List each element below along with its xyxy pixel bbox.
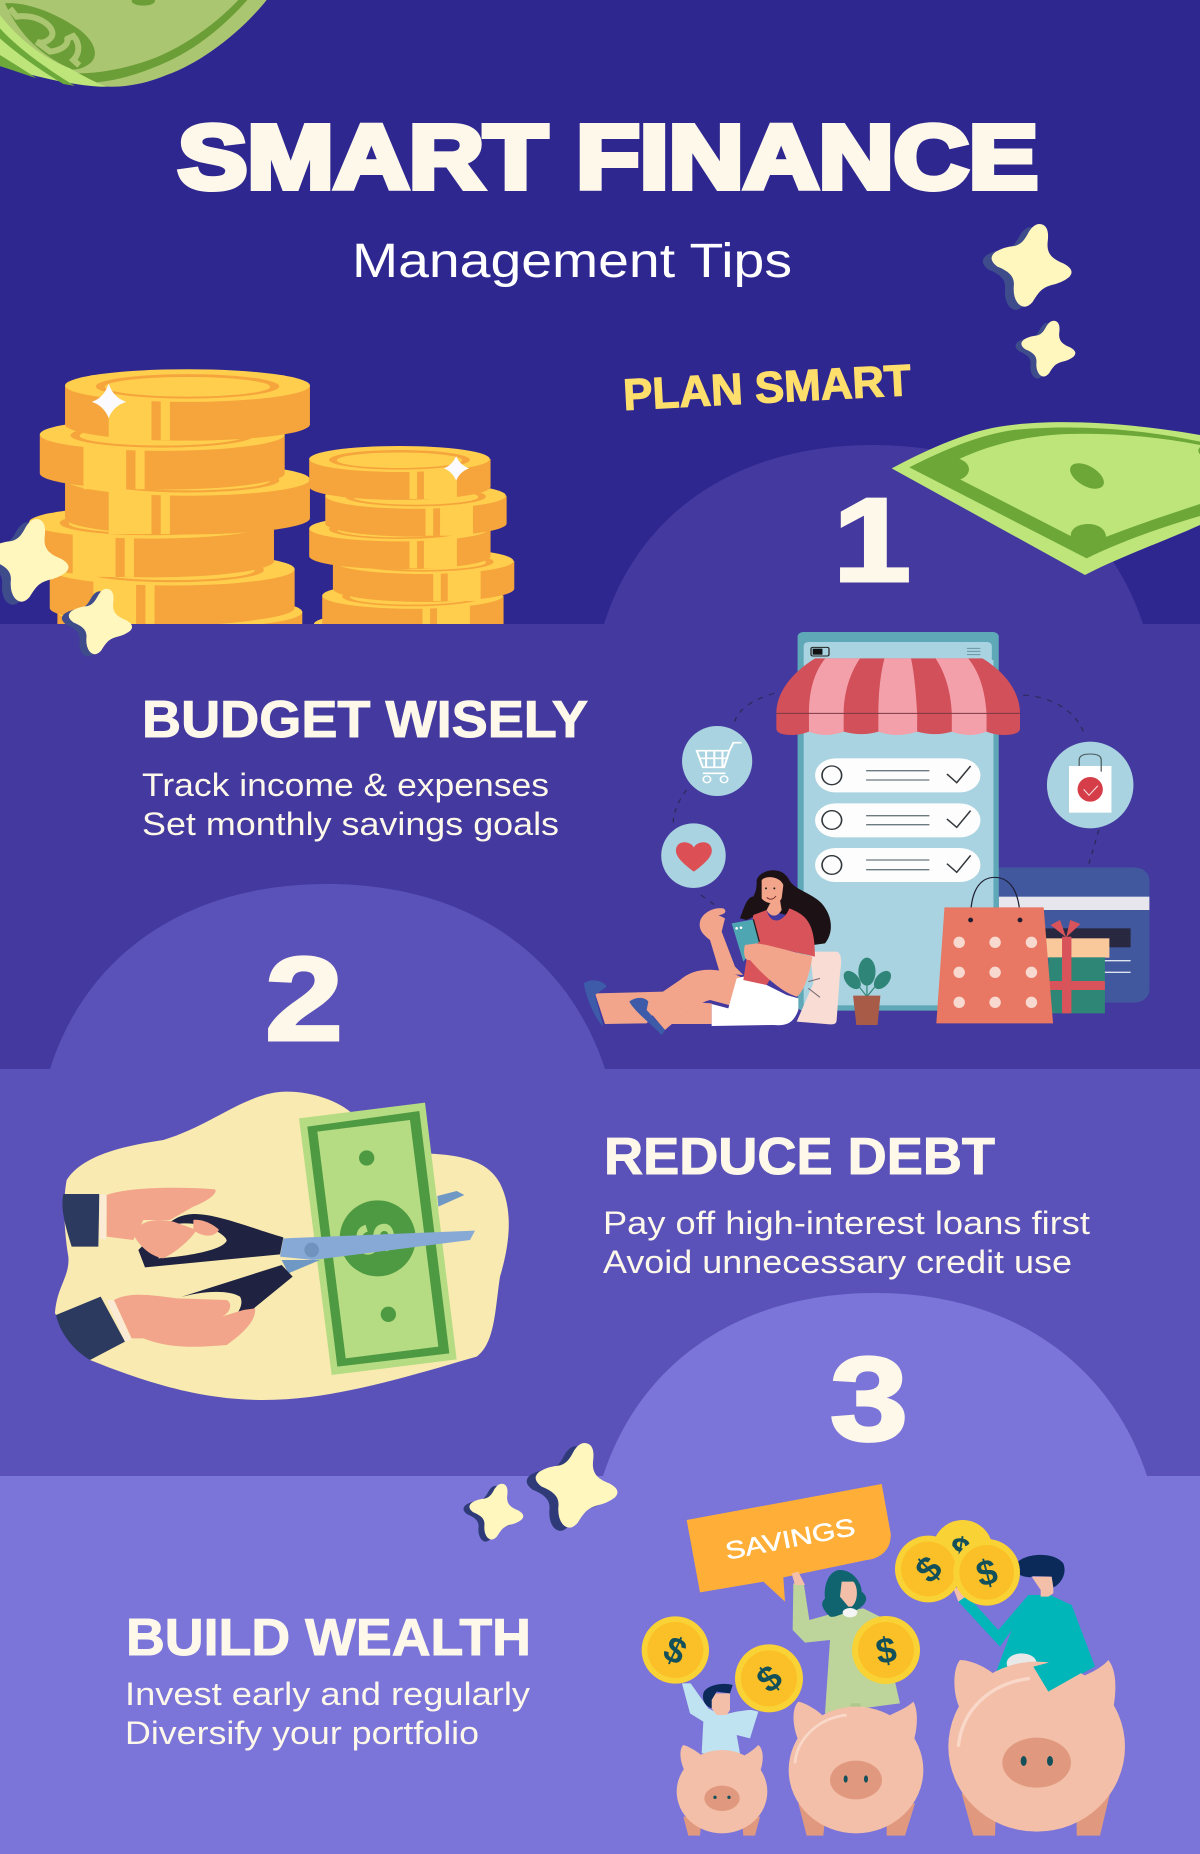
hand lower [56,1295,255,1360]
head [762,877,783,916]
pillow [797,952,841,1024]
banknote: $ [341,1219,408,1258]
heading: reduce debt: REDUCE DEBT [604,1128,995,1186]
back blade [437,1191,464,1207]
mother [792,1570,900,1719]
icon: star left lower [54,580,140,665]
coins: $ [873,1628,899,1672]
number 2: 2 [265,932,343,1066]
panel: reduce debt [0,1069,1200,1489]
text: credit use: Avoid unnecessary credit use [603,1244,1072,1280]
hump behind number 2 [50,884,605,1069]
scissors [138,1214,475,1329]
banknote [299,1103,457,1375]
text: savings goals: Set monthly savings goals [142,806,559,842]
coins: $ [748,1656,790,1701]
bubble: heart [661,823,726,888]
shopping bag [936,877,1053,1023]
panel: build wealth [0,1476,1200,1854]
coins: $ [947,1528,973,1572]
father [953,1555,1095,1692]
pig medium [789,1702,923,1836]
coins: $ [907,1548,950,1591]
arm holding phone [744,943,812,997]
dashed connectors [673,693,1099,907]
illustration: shopping app [661,632,1149,1025]
text: diversify: Diversify your portfolio [125,1715,479,1751]
heading: build wealth: BUILD WEALTH [126,1609,531,1667]
awning [776,658,1020,735]
illustration: scissors cutting money [55,1092,509,1400]
phone [798,632,999,1011]
legs [584,970,743,1035]
shorts [712,977,798,1026]
list rows [815,758,980,882]
coins: $ [972,1550,1002,1595]
hair [740,870,831,945]
text: invest early: Invest early and regularly [125,1676,530,1712]
number 3: 3 [830,1332,908,1466]
gift box [1046,920,1109,1013]
coins [642,1520,1020,1712]
sign: savings [687,1484,891,1602]
arm raised [700,908,743,975]
illustration: savings pigs [642,1484,1125,1836]
title: SMART FINANCE [178,108,1038,208]
tee [743,908,815,985]
icon: banknote right [892,422,1200,575]
icon: star section three large [517,1431,627,1542]
heading: budget wisely: BUDGET WISELY [142,691,588,749]
text: high interest: Pay off high-interest loans first [603,1205,1090,1241]
plant [840,958,895,1025]
pig small [677,1745,767,1836]
icon: banknote top left [0,0,267,87]
icon: star section three small [457,1476,530,1549]
illustration: woman with phone [584,870,841,1035]
sign: savings: SAVINGS [723,1514,857,1566]
icon: star small top right [1009,313,1082,386]
phone [732,919,759,962]
child [682,1683,758,1753]
hand upper fingers [133,1220,219,1258]
hump behind number 1 [604,445,1143,624]
bubble: bag [1047,742,1133,828]
tagline: plan smart: PLAN SMART [622,356,912,420]
bubble: cart [682,726,752,796]
hump behind number 3 [603,1293,1147,1476]
subtitle: Management Tips [352,235,792,288]
icon: star large top right [973,213,1081,321]
text: track income: Track income & expenses [142,767,549,803]
hand upper palm [62,1188,216,1247]
coins: $ [658,1627,693,1673]
panel: budget wisely [0,624,1200,1084]
icon: coin stacks [29,369,514,667]
number 1: 1 [833,473,911,607]
credit card [984,867,1149,1003]
pig large [948,1657,1125,1836]
blob [55,1092,509,1400]
icon: star left upper [0,508,78,616]
